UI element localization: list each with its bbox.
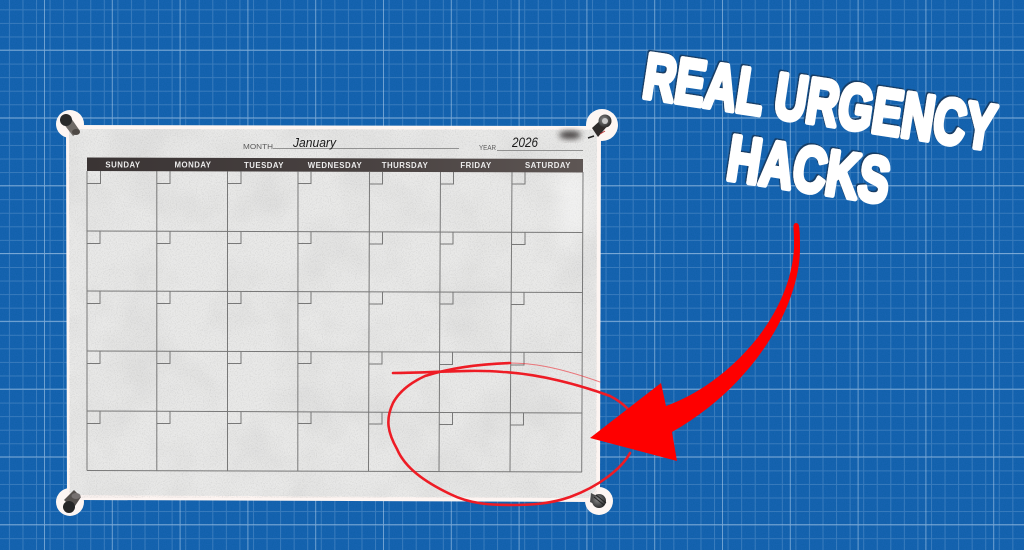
weekday header bar: SATURDAY: [525, 161, 571, 170]
weekday header bar: WEDNESDAY: [308, 161, 363, 170]
month and year fields: January: [292, 136, 337, 150]
weekday header bar: SUNDAY: [105, 160, 141, 170]
pin backings: white sticker outline: [56, 109, 618, 516]
date boxes: [87, 171, 525, 184]
icon: push pin bottom left: [63, 490, 81, 513]
calendar grid: [87, 171, 583, 472]
icon: push pin top left: [60, 114, 80, 136]
icon: push pin top right: [588, 114, 612, 138]
month and year fields: MONTH: [243, 142, 273, 151]
month and year fields: [243, 135, 583, 152]
weekday header bar: THURSDAY: [382, 161, 429, 170]
weekday header bar: MONDAY: [175, 160, 212, 170]
red hand-drawn circle: [388, 363, 630, 505]
paper sheet: [66, 125, 601, 502]
month and year fields: YEAR: [479, 145, 496, 152]
weekday header bar: FRIDAY: [460, 161, 492, 170]
arrow: red curved arrow pointing at the calendar: [590, 223, 800, 461]
title: REAL URGENCY HACKS: HACKS: [723, 122, 895, 217]
icon: push pin bottom right: [590, 493, 606, 508]
weekday header bar: TUESDAY: [244, 161, 284, 170]
weekday header bar: [87, 158, 583, 172]
month and year fields: 2026: [511, 135, 538, 150]
panel: paper calendar: [56, 109, 618, 516]
